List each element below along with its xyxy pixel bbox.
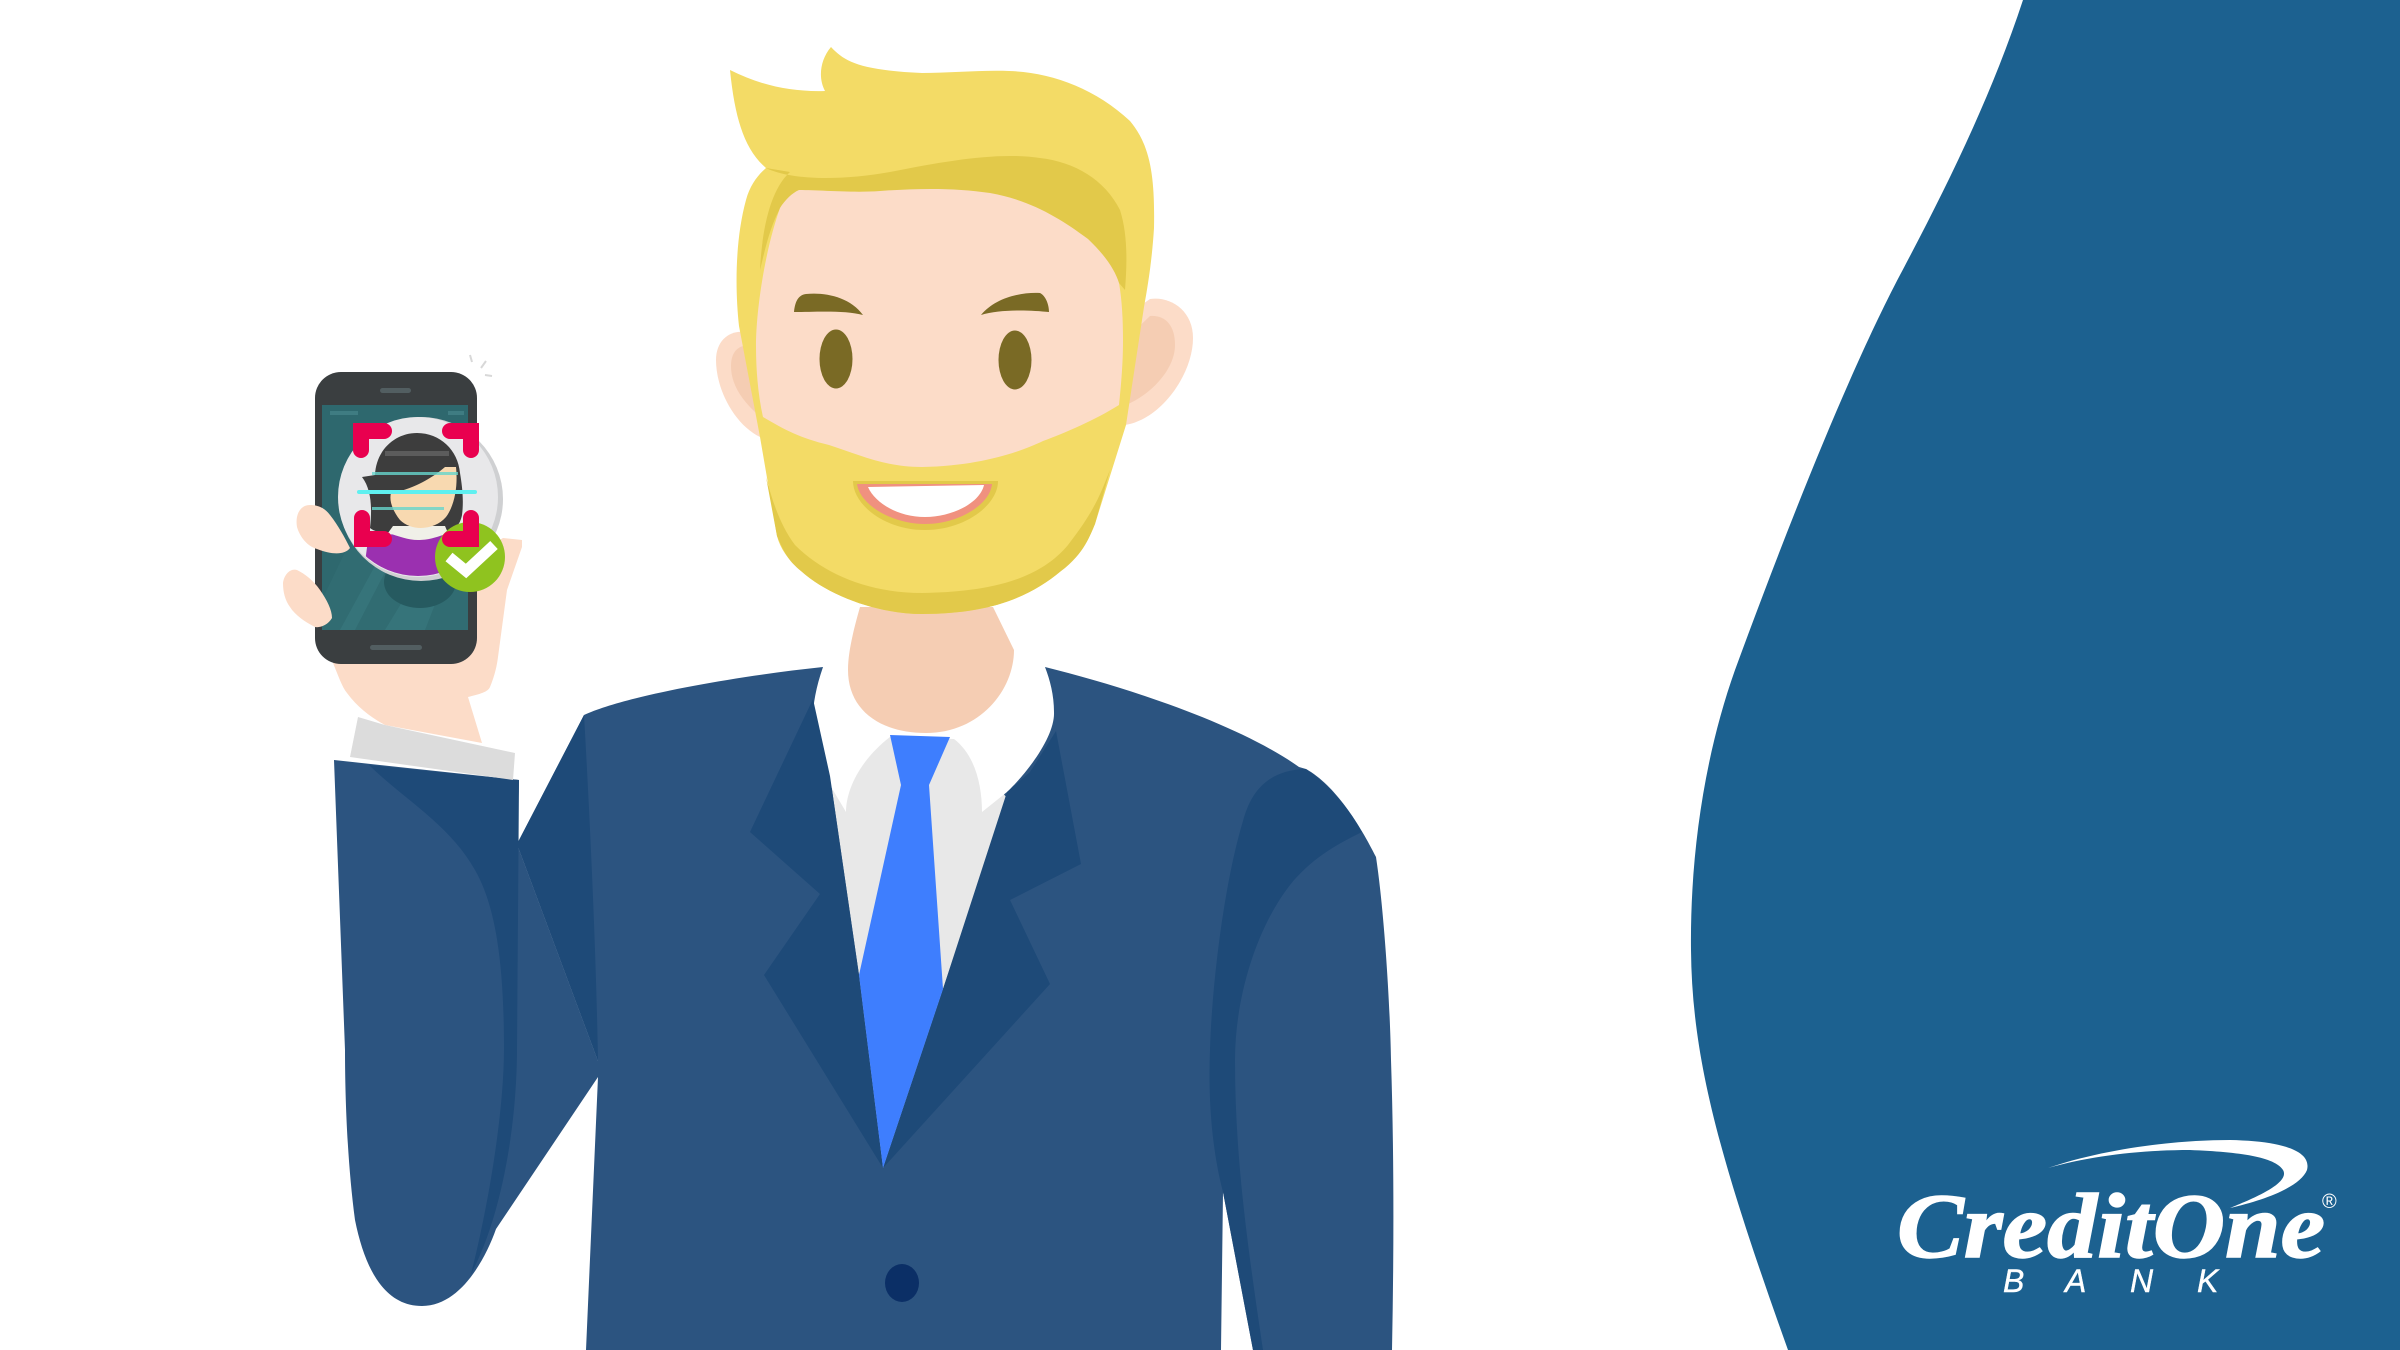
panel: blue curved background [1691, 0, 2400, 1350]
mouth [853, 481, 998, 530]
jacket left side shadow [517, 715, 598, 1061]
raised left arm sleeve [334, 760, 598, 1306]
jacket button [885, 1264, 919, 1302]
hand palm [333, 538, 522, 743]
logo swoosh [2048, 1140, 2308, 1208]
phone held in hand [283, 355, 505, 664]
phone body [315, 372, 477, 664]
beard shadow [766, 470, 1110, 614]
logo: Credit One Bank [1897, 1140, 2337, 1299]
shirt collar [813, 667, 1054, 812]
eyes [820, 330, 852, 388]
scan lines [357, 472, 477, 510]
sparkle marks [470, 355, 492, 376]
right shoulder and arm shadow [1210, 769, 1362, 1350]
scanned woman portrait [362, 433, 463, 576]
eyebrows [794, 294, 863, 315]
right ear [1120, 299, 1193, 425]
hair and beard [730, 47, 1154, 614]
upper finger [297, 505, 350, 553]
left ear [716, 332, 765, 437]
jacket body [517, 667, 1393, 1350]
red scan frame corners [361, 431, 471, 539]
phone speaker [380, 388, 411, 393]
registered mark: ® [2322, 1191, 2337, 1213]
left lapel [750, 699, 883, 1168]
shirt cuff [350, 717, 515, 780]
confirmation check badge [435, 522, 505, 592]
sleeve shadow [369, 765, 519, 1274]
person: man in suit [333, 47, 1393, 1350]
logo subtitle: BANK [2003, 1263, 2220, 1299]
neck [848, 607, 1014, 733]
face [756, 189, 1123, 467]
right lapel [883, 731, 1081, 1168]
logo wordmark: CreditOne [1897, 1175, 2325, 1277]
necktie [859, 735, 950, 1168]
face scan circle [339, 417, 503, 581]
hair shadow [760, 156, 1126, 290]
lower finger [283, 570, 332, 627]
phone home bar [370, 645, 422, 650]
shirt [830, 730, 1007, 1168]
phone screen [322, 405, 468, 630]
